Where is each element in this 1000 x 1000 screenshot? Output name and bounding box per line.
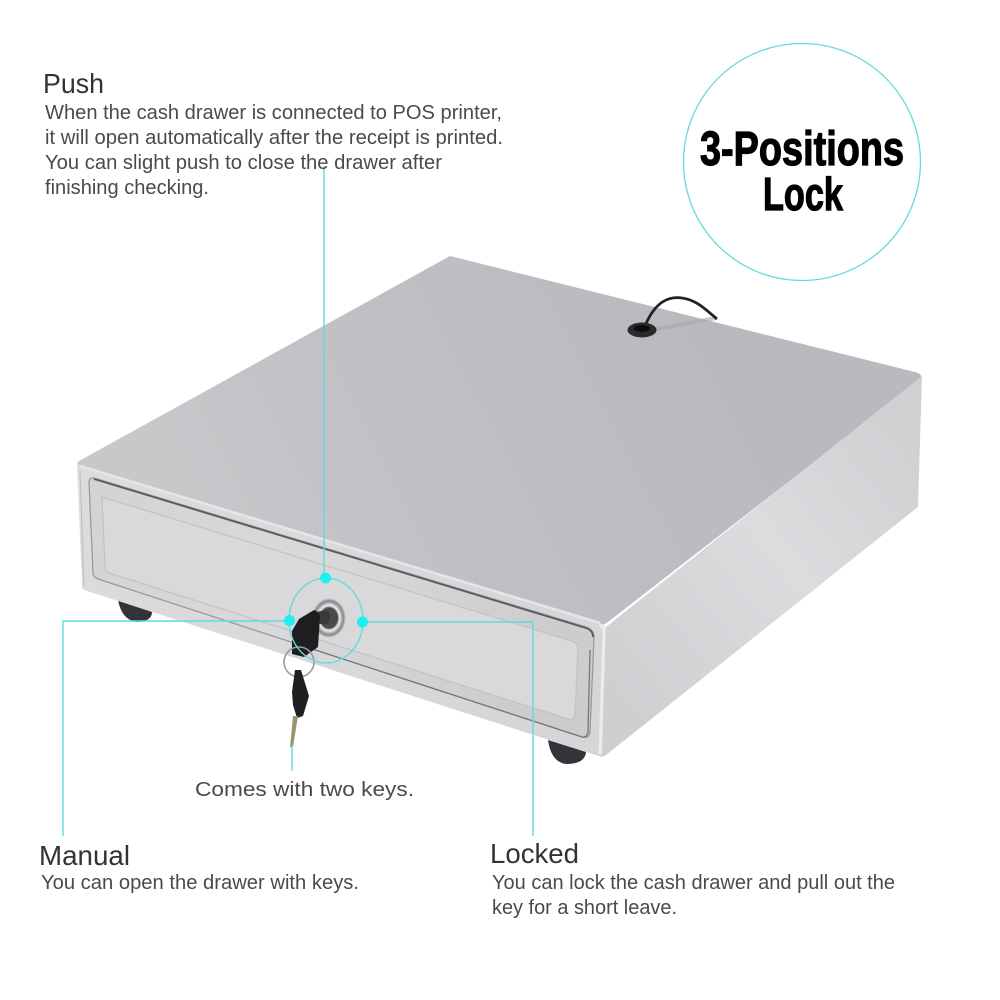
manual callout text [39,840,359,894]
front face [77,464,606,757]
top face [77,256,921,625]
push callout text: When the cash drawer is connected to POS printer, [45,101,502,124]
push callout text: finishing checking. [45,176,209,199]
push callout text: Push [43,68,104,99]
locked callout text [490,838,895,919]
push callout text: You can slight push to close the drawer after [45,151,442,174]
rubber feet [118,600,586,764]
keys [284,610,320,747]
locked callout text: Locked [490,838,579,869]
lock cylinder [312,598,346,638]
manual callout text: Manual [39,840,130,871]
drawer inset [102,497,578,719]
badge: 3-positions lock: Lock [763,168,843,220]
drawer panel [89,478,594,737]
cable grommet and cable [628,298,717,338]
locked callout text: key for a short leave. [492,896,677,919]
badge: 3-positions lock: 3-Positions [700,123,904,176]
badge: 3-positions lock [684,44,920,280]
push callout text [43,68,503,199]
push callout text: it will open automatically after the receipt is printed. [45,126,503,149]
right side face [602,376,922,757]
cash drawer product [77,256,922,764]
locked callout text: You can lock the cash drawer and pull out the [492,871,895,894]
manual callout text: You can open the drawer with keys. [41,871,359,894]
callout dots [284,572,368,628]
callout ring and lines [63,166,533,836]
keys caption: Comes with two keys. [195,778,414,801]
